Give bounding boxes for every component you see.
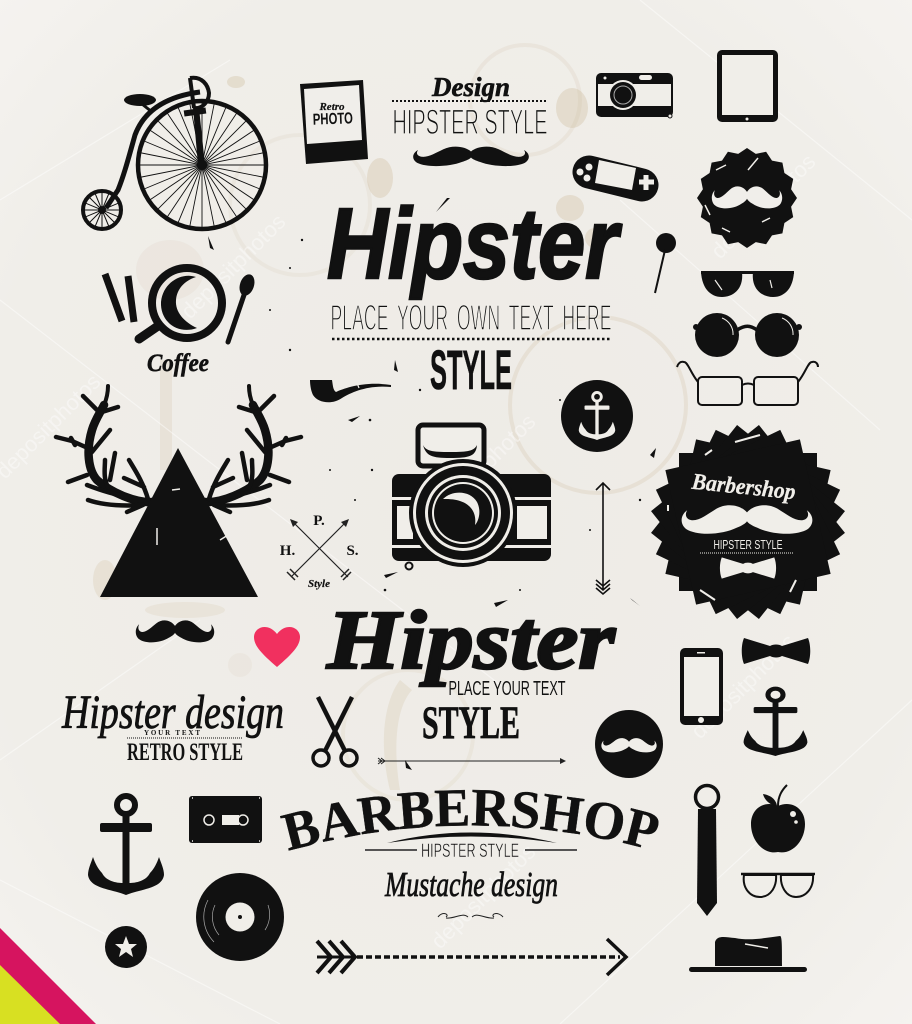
heading: design hipster style bbox=[392, 72, 548, 166]
icon: coffee cup bbox=[105, 268, 257, 377]
icon: round glasses bbox=[693, 313, 802, 357]
crossed arrows monogram bbox=[280, 513, 359, 590]
title: barbershop arc: Mustache design bbox=[384, 865, 558, 904]
crossed arrows monogram: Style bbox=[308, 578, 330, 590]
badge: barbershop bbox=[651, 425, 845, 619]
watermark bbox=[0, 149, 820, 954]
heading: design hipster style: Design bbox=[431, 72, 510, 102]
title: barbershop arc: BARBERSHOP bbox=[280, 790, 659, 851]
icon: penny-farthing bicycle bbox=[83, 78, 266, 229]
icon: outline glasses bbox=[677, 362, 818, 405]
icon: bow tie bbox=[742, 638, 810, 664]
crossed arrows monogram: H. bbox=[280, 543, 295, 559]
watermark: depositphotos bbox=[176, 209, 290, 324]
retro photo polaroid bbox=[300, 80, 368, 164]
crossed arrows monogram: P. bbox=[313, 513, 325, 529]
badge: small mustache bbox=[697, 148, 797, 248]
crossed arrows monogram: S. bbox=[346, 543, 359, 559]
icon: scissors bbox=[313, 697, 357, 766]
icon: anchor circle bbox=[561, 380, 633, 452]
title: main hipster: Hipster bbox=[327, 188, 622, 300]
heading: hipster design: Hipster design bbox=[61, 686, 284, 739]
icon: phone bbox=[680, 648, 723, 725]
watermark: depositphotos bbox=[426, 409, 540, 524]
coffee stains bbox=[93, 76, 605, 790]
heading: hipster design: YOUR TEXT bbox=[144, 729, 200, 737]
arrow: big dashed bbox=[317, 939, 626, 975]
coffee rings bbox=[230, 45, 686, 800]
heading: hipster design bbox=[61, 686, 284, 766]
arrow: vertical bbox=[596, 483, 610, 594]
title: barbershop arc bbox=[280, 790, 659, 919]
icon: mustache bbox=[136, 620, 214, 642]
title: main hipster: STYLE bbox=[430, 338, 512, 401]
ink splatter bbox=[208, 198, 656, 770]
icon: apple bbox=[751, 785, 805, 852]
arrow: thin horizontal bbox=[378, 758, 566, 764]
icon: big anchor bbox=[88, 796, 164, 895]
icon: game controller bbox=[576, 160, 654, 190]
title: second hipster: Hipster bbox=[326, 594, 616, 687]
icon: small anchor bbox=[744, 689, 807, 756]
title: main hipster: PLACE YOUR OWN TEXT HERE bbox=[330, 297, 612, 338]
icon: small camera bbox=[596, 73, 673, 118]
icon: pipe bbox=[310, 380, 391, 402]
icon: tie bbox=[696, 786, 718, 916]
icon: thin glasses bbox=[741, 874, 815, 897]
heading: hipster design: RETRO STYLE bbox=[127, 739, 243, 766]
icon: mustache circle bbox=[595, 710, 663, 778]
title: second hipster: PLACE YOUR TEXT bbox=[448, 678, 566, 700]
watermark: depositphotos bbox=[686, 629, 800, 744]
icon: big camera bbox=[392, 425, 551, 570]
heading: design hipster style: HIPSTER STYLE bbox=[392, 103, 548, 142]
icon: hat bbox=[689, 936, 807, 972]
corner ribbon bbox=[0, 928, 96, 1024]
title: main hipster bbox=[327, 188, 622, 401]
retro photo polaroid: Retro bbox=[318, 101, 345, 113]
icon: cassette bbox=[189, 796, 262, 843]
icon: sunglasses bbox=[701, 271, 794, 297]
retro photo polaroid: PHOTO bbox=[313, 110, 353, 129]
title: second hipster: STYLE bbox=[422, 697, 520, 749]
icon: coffee cup: Coffee bbox=[147, 350, 209, 377]
icon: tablet bbox=[717, 50, 778, 122]
icon: vinyl record bbox=[196, 873, 284, 961]
watermark: depositphotos bbox=[706, 149, 820, 264]
icon: deer antlers triangle bbox=[56, 386, 301, 597]
icon: lollipop bbox=[655, 233, 676, 293]
title: second hipster bbox=[326, 594, 616, 749]
icon: heart bbox=[254, 627, 300, 667]
badge: barbershop: Barbershop bbox=[690, 469, 797, 504]
icon: star circle bbox=[105, 926, 147, 968]
title: barbershop arc: HIPSTER STYLE bbox=[421, 841, 519, 862]
watermark: depositphotos bbox=[426, 839, 540, 954]
badge: barbershop: HIPSTER STYLE bbox=[714, 537, 783, 552]
